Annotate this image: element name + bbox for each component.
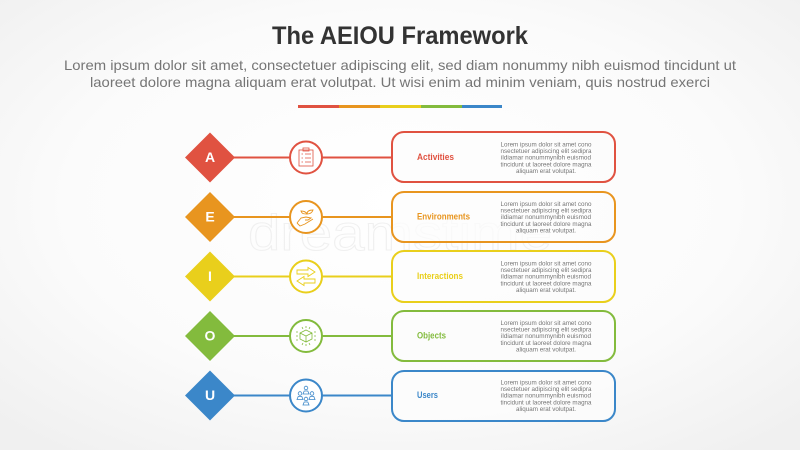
diamond: A: [185, 132, 235, 182]
diamond: E: [185, 192, 235, 242]
icon: group of users: [290, 380, 322, 412]
icon: cube with rays: [290, 320, 322, 352]
description: nsectetuer adipiscing elit sedipra: [500, 208, 592, 214]
title: The AEIOU Framework: [272, 22, 528, 50]
description: [500, 380, 592, 413]
connector line: [230, 335, 393, 337]
letter U: U: [205, 387, 215, 403]
description: tincidunt ut laoreet dolore magna: [500, 281, 592, 287]
label: Activities: Activities: [417, 152, 454, 162]
description: ildiamar nonummynibh euismod: [501, 394, 591, 400]
description: Lorem ipsum dolor sit amet cono: [500, 202, 592, 208]
connector line: [230, 276, 393, 278]
row: Interactions: [185, 251, 615, 302]
icon: clipboard: [290, 142, 322, 174]
description: tincidunt ut laoreet dolore magna: [500, 222, 592, 228]
label: Interactions: Interactions: [417, 271, 463, 281]
connector line: [230, 216, 393, 218]
icon: exchange arrows: [290, 260, 322, 292]
box: Activities: [392, 132, 615, 182]
box: Environments: [392, 192, 615, 242]
description: aliquam erat volutpat.: [516, 348, 576, 354]
subtitle text: Lorem ipsum dolor sit amet, consectetuer adipiscing elit, sed diam nonummy nibh euismod tincidunt ut: [64, 57, 736, 73]
connector line: [230, 394, 393, 396]
description: [500, 202, 592, 234]
letter A: A: [205, 149, 215, 165]
description: [500, 142, 592, 175]
description: nsectetuer adipiscing elit sedipra: [500, 268, 592, 274]
letter I: I: [208, 268, 212, 284]
description: Lorem ipsum dolor sit amet cono: [500, 262, 592, 268]
rainbow divider: [298, 105, 502, 108]
connector line: [230, 156, 393, 158]
label: Environments: Environments: [417, 212, 470, 222]
icon: hand with plant: [290, 201, 322, 233]
diamond: U: [185, 370, 235, 420]
description: tincidunt ut laoreet dolore magna: [500, 400, 592, 406]
diamond: I: [185, 252, 235, 302]
subtitle text: laoreet dolore magna aliquam erat volutpat. Ut wisi enim ad minim veniam, quis nostrud exerci: [90, 74, 710, 90]
description: [500, 321, 592, 354]
row: Environments: [185, 192, 615, 242]
box: Interactions: [392, 251, 615, 302]
label: Objects: Objects: [417, 330, 446, 340]
label: Users: Users: [417, 390, 438, 400]
description: nsectetuer adipiscing elit sedipra: [500, 149, 592, 155]
description: Lorem ipsum dolor sit amet cono: [500, 321, 592, 327]
description: [500, 262, 592, 294]
description: ildiamar nonummynibh euismod: [501, 215, 591, 221]
description: ildiamar nonummynibh euismod: [501, 275, 591, 281]
letter E: E: [205, 208, 215, 224]
box: Objects: [392, 311, 615, 361]
row: Objects: [185, 311, 615, 361]
description: aliquam erat volutpat.: [516, 228, 576, 234]
diamond: O: [185, 311, 235, 361]
description: tincidunt ut laoreet dolore magna: [500, 341, 592, 347]
description: tincidunt ut laoreet dolore magna: [500, 162, 592, 168]
description: nsectetuer adipiscing elit sedipra: [500, 328, 592, 334]
description: aliquam erat volutpat.: [516, 407, 576, 413]
description: nsectetuer adipiscing elit sedipra: [500, 387, 592, 393]
description: Lorem ipsum dolor sit amet cono: [500, 142, 592, 148]
description: aliquam erat volutpat.: [516, 288, 576, 294]
letter O: O: [205, 328, 216, 344]
description: ildiamar nonummynibh euismod: [501, 334, 591, 340]
watermark: dreamstime: [248, 205, 552, 261]
description: Lorem ipsum dolor sit amet cono: [500, 380, 592, 386]
row: Activities: [185, 132, 615, 182]
description: ildiamar nonummynibh euismod: [501, 156, 591, 162]
description: aliquam erat volutpat.: [516, 169, 576, 175]
box: Users: [392, 371, 615, 421]
row: Users: [185, 370, 615, 421]
subtitle text: [64, 57, 736, 90]
